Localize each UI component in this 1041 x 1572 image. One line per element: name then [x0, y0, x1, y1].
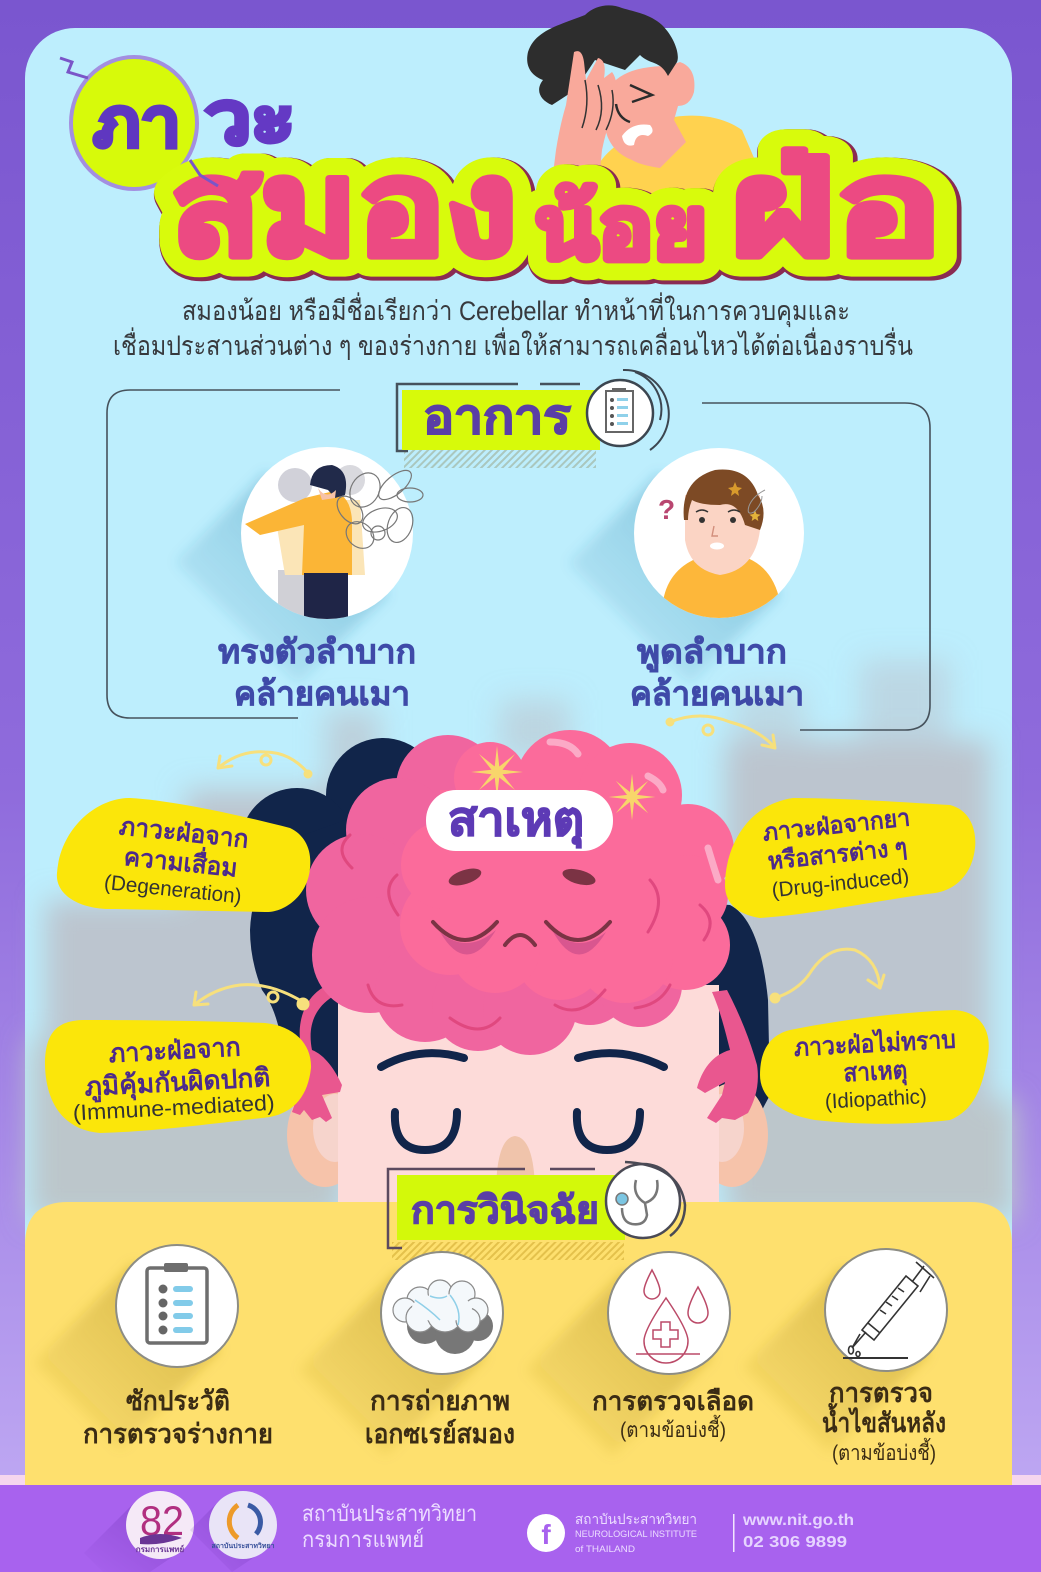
icon: syringe [843, 1262, 934, 1358]
title main words lime: ฝ่อ [730, 135, 942, 282]
title main words outline: น้อย [537, 183, 709, 279]
callout: degeneration: ความเสื่อม [123, 839, 239, 883]
icon: clipboard [147, 1263, 207, 1343]
logo: 82 anniversary: 82 [140, 1497, 184, 1544]
symptom label: ทรงตัวลำบาก [218, 633, 416, 670]
label: การตรวจร่างกาย [83, 1419, 273, 1449]
logo: 82 anniversary [84, 1491, 194, 1572]
blurred city backdrop [30, 660, 1015, 1220]
heading: diagnosis [388, 1162, 685, 1260]
symptom 1: balance [176, 447, 423, 712]
title main words pink: ฝ่อ [730, 135, 942, 282]
heading: causes: สาเหตุ [448, 792, 584, 848]
man hair [527, 5, 678, 105]
facebook name: of THAILAND [575, 1544, 635, 1555]
callout: drug-induced: (Drug-induced) [771, 865, 910, 902]
logo: 82 anniversary: กรมการแพทย์ [136, 1544, 185, 1554]
diagnosis item 1: history [34, 1245, 273, 1449]
man neck and face [604, 62, 694, 168]
icon: clipboard [587, 370, 669, 450]
ears [287, 1083, 768, 1187]
arrow lower right [771, 949, 884, 1002]
callout: idiopathic: (Idiopathic) [824, 1085, 927, 1114]
face nose [496, 1136, 535, 1190]
label: เอกซเรย์สมอง [365, 1418, 515, 1449]
illustration: headache man [527, 5, 770, 195]
website and phone: 02 306 9899 [743, 1534, 847, 1551]
callout: immune-mediated: (Immune-mediated) [72, 1090, 275, 1125]
label [822, 1378, 946, 1465]
icon: brain [393, 1280, 493, 1354]
callout: immune-mediated: ภาวะฝ่อจาก [108, 1032, 241, 1068]
brain arms [292, 985, 758, 1123]
label: การตรวจ [829, 1378, 933, 1408]
title main words pink [171, 135, 942, 282]
brain eyebrows [447, 865, 597, 889]
face eyes [395, 1112, 640, 1150]
question mark and stars: ? [658, 494, 675, 525]
brain closed eyes [433, 922, 610, 945]
callout: immune-mediated [45, 1020, 311, 1133]
facebook name [575, 1511, 697, 1555]
tangled scribble [332, 465, 423, 554]
callout: degeneration: (Degeneration) [103, 871, 243, 908]
icon: facebook: f [541, 1519, 551, 1550]
label: (ตามข้อบ่งชี้) [620, 1415, 726, 1442]
symptom label: คล้ายคนเมา [234, 675, 410, 712]
brain eye lids [440, 930, 606, 955]
person dizzy illustration [245, 465, 365, 623]
brain outer lobes left [306, 735, 682, 1055]
arrow lower left [194, 985, 308, 1009]
arrows [194, 716, 884, 1009]
website and phone [742, 1512, 854, 1551]
intro text [113, 292, 913, 361]
arrow top left [218, 752, 311, 777]
label: น้ำไขสันหลัง [822, 1402, 946, 1438]
label: (ตามข้อบ่งชี้) [832, 1438, 936, 1465]
callout: drug-induced: ภาวะฝ่อจากยา [761, 805, 911, 847]
hair back [240, 738, 770, 1130]
intro text: สมองน้อย หรือมีชื่อเรียกว่า Cerebellar ทำหน้าที่ในการควบคุมและ [182, 292, 850, 328]
symptom label [630, 633, 804, 712]
zigzag accents [60, 58, 218, 186]
footer [0, 1485, 1041, 1572]
face eyebrows [381, 1053, 664, 1067]
callout: immune-mediated: ภูมิคุ้มกันผิดปกติ [84, 1062, 271, 1104]
question mark and stars [658, 482, 765, 525]
intro text: เชื่อมประสานส่วนต่าง ๆ ของร่างกาย เพื่อให้สามารถเคลื่อนไหวได้ต่อเนื่องราบรื่น [113, 327, 913, 361]
title main words lime [171, 135, 942, 282]
brain folds and highlights [342, 835, 710, 1029]
man shirt [585, 116, 770, 195]
symptoms frame [107, 390, 930, 730]
facebook name: สถาบันประสาทวิทยา [575, 1511, 697, 1527]
heading: diagnosis: การวินิจฉัย [411, 1190, 599, 1232]
arrow top right [667, 716, 775, 748]
title main words pink: น้อย [535, 181, 707, 277]
icon: stethoscope [606, 1162, 685, 1238]
heading: symptoms [397, 370, 669, 468]
logo: neurological institute: สถาบันประสาทวิทยา [211, 1542, 275, 1550]
callout: idiopathic: ภาวะฝ่อไม่ทราบ [793, 1024, 957, 1062]
footer organisation name [302, 1501, 477, 1552]
symptom label: พูดลำบาก [637, 633, 787, 673]
callout: idiopathic [760, 1010, 989, 1124]
heading: causes [426, 790, 613, 851]
label [592, 1386, 754, 1442]
footer organisation name: กรมการแพทย์ [302, 1527, 424, 1552]
brain main lobes [400, 730, 734, 1003]
title main words lime: น้อย [535, 181, 707, 277]
title main words outline: สมอง [173, 137, 519, 284]
symptom label [218, 633, 416, 712]
title main words lime: สมอง [171, 135, 517, 282]
logo: neurological institute [190, 1491, 277, 1572]
title main words outline: ฝ่อ [732, 137, 944, 284]
symptom label: คล้ายคนเมา [630, 675, 804, 712]
title word bhava circle [71, 57, 197, 189]
panel: diagnosis yellow [25, 1202, 1012, 1490]
callout: drug-induced: หรือสารต่าง ๆ [766, 834, 908, 875]
callout: degeneration: ภาวะฝ่อจาก [118, 812, 250, 854]
callout: drug-induced [725, 798, 975, 918]
diagnosis item 2: brain x-ray [299, 1252, 515, 1456]
man face details [616, 85, 652, 122]
icon: blood drops [636, 1270, 708, 1363]
symptom 2: speech [569, 448, 804, 712]
title main words outline [173, 137, 944, 284]
title word wa: วะ [205, 79, 295, 159]
pink strip [0, 1475, 1041, 1485]
heading: symptoms: อาการ [423, 391, 571, 444]
diagnosis item 4: lumbar puncture [743, 1249, 947, 1465]
diagnosis item 3: blood test [526, 1252, 754, 1456]
title word bhava circle: ภา [93, 85, 181, 161]
sparkles [471, 746, 655, 820]
label: ซักประวัติ [126, 1386, 230, 1416]
icon: facebook [527, 1514, 565, 1552]
callout: degeneration [57, 798, 310, 912]
illustration: character head with brain [240, 730, 770, 1210]
facebook name: NEUROLOGICAL INSTITUTE [575, 1529, 697, 1540]
face [338, 985, 719, 1210]
man hand [551, 51, 617, 190]
footer organisation name: สถาบันประสาทวิทยา [302, 1501, 477, 1526]
website and phone: www.nit.go.th [742, 1512, 854, 1529]
title main words pink: สมอง [171, 135, 517, 282]
label [365, 1386, 515, 1449]
title [60, 57, 944, 284]
callout: idiopathic: สาเหตุ [843, 1056, 908, 1090]
boy illustration [662, 470, 782, 620]
label: การตรวจเลือด [592, 1386, 754, 1416]
label: การถ่ายภาพ [370, 1386, 510, 1416]
label [83, 1386, 273, 1449]
